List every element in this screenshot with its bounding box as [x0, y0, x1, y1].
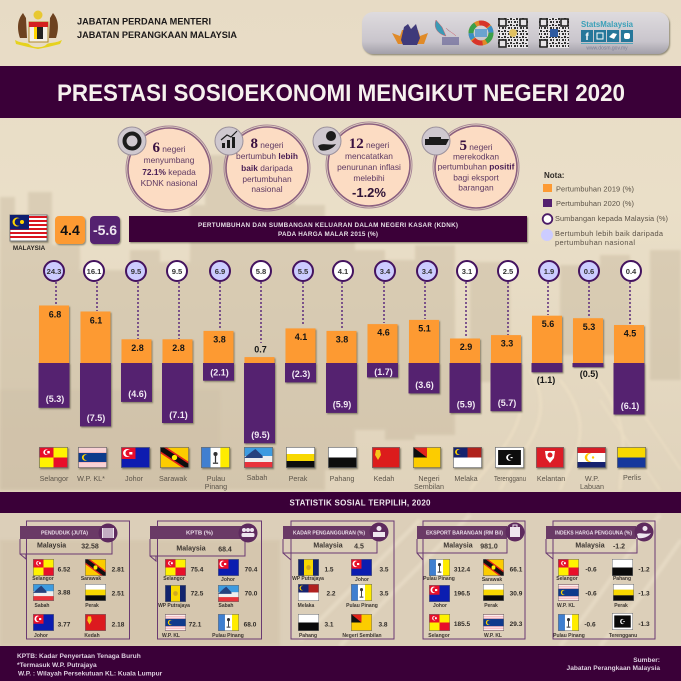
- row 3: 3.1: [324, 622, 334, 628]
- row 3: Johor: [34, 633, 48, 639]
- logo: strategi negara: [435, 20, 459, 45]
- flag: Pulau Pinang: Pulau: [207, 474, 225, 483]
- Selangor column: 6.8: [49, 310, 61, 320]
- row 1: 66.1: [510, 566, 523, 574]
- flag: Terengganu: [494, 447, 526, 483]
- Kedah column: 3.4: [380, 267, 391, 276]
- Johor column: 2.8: [131, 343, 144, 353]
- row 2: Pulau Pinang: [346, 603, 378, 609]
- Sabah column: (9.5): [251, 430, 270, 440]
- row 1: Pahang: [613, 576, 631, 582]
- Johor column: 9.5: [131, 267, 142, 276]
- Sarawak column: [162, 261, 193, 423]
- panel: KPTB: Malaysia: [176, 546, 206, 552]
- flag: Melaka: [453, 447, 482, 483]
- panel: penduduk: [20, 521, 130, 639]
- Malaysia 2020 value: -5.6: [93, 222, 117, 238]
- Perlis column: [614, 261, 644, 414]
- logo: SDG wheel: [471, 23, 491, 43]
- flag: Pahang: Pahang: [330, 474, 354, 483]
- callout: 8 negeri: 8 negeri: [250, 136, 284, 152]
- row 1: 70.4: [245, 566, 258, 574]
- chart heading banner: PERTUMBUHAN DAN SUMBANGAN KELUARAN DALAM NEGERI KASAR (KDNK): [198, 222, 458, 229]
- panel: kadar pengangguran: [283, 521, 394, 639]
- flag: Selangor: Selangor: [40, 474, 69, 483]
- Sabah column: 0.7: [254, 344, 267, 354]
- callout: 12 negeri: melebihi: [353, 173, 385, 183]
- Pulau Pinang column: 6.9: [215, 267, 225, 276]
- flag: W.P. KL: [77, 447, 107, 483]
- title band: PRESTASI SOSIOEKONOMI MENGIKUT NEGERI 2020: [57, 80, 625, 107]
- legend item: 2019: Pertumbuhan 2019 (%): [556, 184, 634, 194]
- section band: social statistics: [0, 492, 681, 513]
- row 2: 30.9: [510, 590, 523, 598]
- row 2: -1.3: [638, 590, 650, 598]
- panel: penduduk: 32.58: [81, 544, 99, 550]
- StatsMalaysia social block: [581, 19, 633, 52]
- row 2: 2.2: [326, 590, 336, 598]
- Pahang column: 4.1: [338, 267, 349, 276]
- flag: Pulau Pinang: [201, 447, 230, 491]
- row 1: [32, 559, 125, 582]
- QR code 2: [539, 18, 569, 48]
- Kelantan column: (1.1): [537, 375, 555, 385]
- Terengganu column: [490, 261, 522, 411]
- callout: 8 negeri: pertumbuhan: [242, 174, 292, 184]
- row 1: 1.5: [324, 566, 334, 574]
- Pahang column: [326, 261, 357, 413]
- Johor column: [121, 261, 152, 402]
- panel: indeks harga pengguna: Malaysia: [575, 542, 605, 550]
- Melaka column: (5.9): [457, 400, 475, 410]
- section band: social statistics: STATISTIK SOSIAL TERPILIH, 2020: [290, 498, 431, 508]
- flag: Perak: [286, 447, 315, 483]
- footer notes: [17, 653, 163, 678]
- Pulau Pinang column: [203, 261, 234, 381]
- row 3: [298, 614, 388, 639]
- flag: Sarawak: Sarawak: [159, 474, 187, 483]
- callout: 6 negeri: KDNK nasional: [141, 178, 198, 188]
- row 3: Pulau Pinang: [553, 633, 585, 639]
- row 3: [33, 614, 125, 639]
- callout: 8 negeri: baik daripada: [241, 163, 293, 173]
- flag: Johor: [121, 447, 150, 483]
- Terengganu column: 2.5: [503, 267, 514, 276]
- legend item: 2020: Pertumbuhan 2020 (%): [556, 199, 634, 208]
- row 1: [423, 559, 523, 583]
- footer notes: *Termasuk W.P. Putrajaya: [17, 662, 97, 669]
- row 3: Kedah: [84, 633, 100, 639]
- row 1: Johor: [221, 577, 235, 583]
- row 3: Negeri Sembilan: [342, 633, 382, 639]
- row 2: 3.5: [379, 590, 389, 598]
- flag: W.P. KL: W.P. KL*: [77, 474, 105, 483]
- row 3: 3.77: [58, 622, 71, 628]
- row 1: [556, 559, 650, 582]
- flag: Kelantan: [536, 447, 565, 483]
- row 3: [428, 614, 523, 639]
- flag: Selangor: [39, 447, 69, 483]
- panel: eksport barangan: [417, 521, 525, 639]
- flag: Pahang: [328, 447, 357, 483]
- icon: unemployment: [370, 522, 388, 542]
- row 2: Johor: [433, 603, 447, 609]
- footer source: Jabatan Perangkaan Malaysia: [567, 665, 660, 672]
- Malaysia 2019 value: [55, 216, 85, 244]
- Sarawak column: 9.5: [172, 267, 183, 276]
- QR code 1: [498, 18, 528, 48]
- footer band: [0, 646, 681, 681]
- Melaka column: [450, 261, 480, 413]
- row 2: [429, 584, 523, 609]
- callout: 5 negeri: merekodkan: [453, 152, 499, 162]
- W.P. Labuan column: 5.3: [583, 322, 595, 332]
- flag: Kelantan: Kelantan: [537, 474, 565, 483]
- footer notes: KPTB: Kadar Penyertaan Tenaga Buruh: [17, 653, 141, 660]
- Perak column: [285, 261, 316, 382]
- logo: banci: [392, 24, 428, 45]
- flag: Kedah: [372, 447, 400, 483]
- row 2: [557, 584, 650, 609]
- Kedah column: 4.6: [377, 328, 390, 338]
- row 3: 29.3: [510, 621, 523, 628]
- panel: kadar pengangguran: 4.5: [354, 544, 364, 550]
- panel: indeks harga pengguna: INDEKS HARGA PENGGUNA (%): [555, 530, 632, 536]
- Perak column: 5.5: [298, 267, 309, 276]
- icon: price hand: [634, 522, 654, 542]
- icon: export: [506, 522, 524, 542]
- row 2: [158, 585, 258, 609]
- row 3: 3.8: [378, 622, 388, 628]
- row 3: 2.18: [112, 622, 125, 628]
- callout: 6 negeri: [118, 126, 212, 212]
- row 1: 3.5: [379, 566, 389, 574]
- Pahang column: (5.9): [333, 400, 351, 410]
- callout: 6 negeri: menyumbang: [144, 155, 195, 165]
- callout: 5 negeri: bagi eksport: [453, 172, 499, 182]
- Malaysia 2020 value: [90, 216, 120, 244]
- StatsMalaysia social block: StatsMalaysia: [581, 19, 633, 29]
- legend item: better than national: [541, 229, 664, 247]
- Johor column: (4.6): [128, 389, 147, 399]
- row 2: Sabah: [218, 603, 234, 609]
- Pulau Pinang column: 3.8: [213, 334, 226, 344]
- flag: Sabah: [244, 447, 273, 482]
- footer source: [567, 657, 660, 672]
- row 1: Selangor: [163, 576, 185, 582]
- row 1: WP Putrajaya: [292, 576, 324, 582]
- callout: 6 negeri: 6 negeri: [152, 140, 186, 156]
- Malaysia flag: MALAYSIA: [13, 245, 46, 252]
- Selangor column: [38, 261, 70, 408]
- row 3: 185.5: [454, 621, 471, 628]
- row 1: -1.2: [638, 566, 650, 574]
- panel: indeks harga pengguna: -1.2: [613, 544, 625, 550]
- flag: Negeri Sembilan: Sembilan: [414, 482, 444, 491]
- row 2: Perak: [614, 603, 628, 609]
- row 2: Perak: [484, 603, 498, 609]
- Kelantan column: [532, 261, 562, 385]
- row 2: Melaka: [298, 603, 315, 609]
- Negeri Sembilan column: [408, 261, 440, 393]
- callout: 5 negeri: 5 negeri: [459, 138, 493, 154]
- W.P. KL column: 16.1: [87, 267, 102, 276]
- background: stats section texture: [0, 515, 681, 646]
- title band: [0, 66, 681, 118]
- footer source: Sumber:: [633, 657, 660, 664]
- W.P. KL column: [80, 261, 111, 426]
- row 3: -0.6: [584, 622, 596, 628]
- callout: 12 negeri: mencatatkan: [345, 151, 393, 161]
- header: logo pill: [362, 12, 669, 54]
- Perak column: (2.3): [292, 369, 310, 379]
- Kelantan column: 5.6: [542, 319, 554, 329]
- flag: W.P. Labuan: W.P.: [585, 474, 599, 483]
- Pahang column: 3.8: [336, 334, 348, 344]
- callout: 12 negeri: penurunan inflasi: [337, 162, 401, 172]
- row 1: Pulau Pinang: [423, 576, 455, 582]
- Malaysia 2019 value: 4.4: [60, 222, 80, 238]
- header: organisation names: [77, 16, 237, 41]
- Malaysia flag: [10, 215, 47, 252]
- flag: Perak: Perak: [289, 474, 308, 483]
- Perlis column: 4.5: [624, 328, 636, 338]
- StatsMalaysia social block: www.dosm.gov.my: [586, 46, 628, 52]
- W.P. Labuan column: (0.5): [580, 369, 598, 379]
- row 2: Perak: [85, 603, 99, 609]
- row 2: W.P. KL: [557, 603, 575, 609]
- row 1: Sarawak: [482, 577, 502, 583]
- callout: 12 negeri: -1.2%: [352, 185, 386, 200]
- flag: Pulau Pinang: Pinang: [205, 482, 227, 491]
- panel: indeks harga pengguna: [546, 521, 655, 639]
- Pulau Pinang column: (2.1): [210, 368, 229, 378]
- row 3: Terengganu: [609, 633, 637, 639]
- W.P. Labuan column: [572, 261, 604, 379]
- flag: W.P. Labuan: Labuan: [580, 482, 604, 491]
- panel: KPTB: 68.4: [218, 546, 232, 554]
- icon: workforce: [238, 524, 258, 542]
- row 3: [553, 613, 650, 639]
- background: lower city and highway: [0, 360, 681, 490]
- row 3: Pahang: [299, 633, 317, 639]
- row 2: 70.0: [245, 590, 258, 598]
- header: organisation names: JABATAN PERDANA MENTERI: [77, 16, 211, 28]
- row 1: 2.81: [112, 566, 125, 574]
- row 1: [292, 559, 389, 583]
- row 3: Pulau Pinang: [212, 633, 244, 639]
- row 3: W.P. KL: [484, 633, 502, 639]
- legend item: contribution: Sumbangan kepada Malaysia (%): [555, 214, 668, 223]
- callout: 5 negeri: barangan: [458, 182, 494, 192]
- legend: nota: [541, 171, 668, 247]
- flag: Terengganu: Terengganu: [494, 474, 526, 483]
- Sarawak column: 2.8: [172, 343, 185, 353]
- row 1: Selangor: [556, 576, 578, 582]
- W.P. KL column: 6.1: [90, 316, 102, 326]
- flag: Kedah: Kedah: [374, 474, 394, 483]
- callout: 8 negeri: [215, 125, 310, 211]
- W.P. Labuan column: 0.6: [584, 267, 594, 276]
- Sabah column: 5.8: [256, 267, 266, 276]
- Perak column: 4.1: [295, 332, 307, 342]
- row 2: 3.88: [58, 590, 71, 596]
- callout: 12 negeri: 12 negeri: [349, 136, 389, 152]
- callout: 6 negeri: 72.1% kepada: [142, 167, 196, 177]
- Melaka column: 3.1: [462, 267, 473, 276]
- flag: Negeri Sembilan: [413, 447, 444, 491]
- callout: 5 negeri: [422, 124, 519, 210]
- panel: eksport barangan: EKSPORT BARANGAN (RM Bil): [426, 530, 503, 536]
- flag: Johor: Johor: [125, 474, 144, 483]
- Selangor column: 24.3: [47, 267, 61, 276]
- flag: Perlis: Perlis: [623, 473, 641, 482]
- StatsMalaysia social block: f: [585, 32, 589, 43]
- legend item: better than national: pertumbuhan nasional: [555, 238, 635, 247]
- callout: 8 negeri: bertumbuh lebih: [236, 151, 298, 161]
- Perlis column: 0.4: [626, 267, 637, 276]
- row 1: -0.6: [585, 566, 597, 574]
- Terengganu column: 3.3: [501, 338, 513, 348]
- row 1: [163, 559, 258, 583]
- flag: W.P. Labuan: [577, 447, 606, 491]
- row 2: 72.5: [191, 590, 204, 598]
- row 3: Selangor: [428, 633, 450, 639]
- panel: kadar pengangguran: KADAR PENGANGGURAN (%): [293, 530, 365, 536]
- row 3: 68.0: [244, 622, 257, 628]
- row 2: [33, 584, 125, 609]
- background: faded city skyline: [0, 155, 681, 490]
- row 2: 196.5: [454, 590, 471, 598]
- row 3: -1.3: [638, 621, 650, 628]
- row 3: [162, 614, 257, 639]
- Negeri Sembilan column: (3.6): [415, 380, 434, 390]
- header: organisation names: JABATAN PERANGKAAN MALAYSIA: [77, 30, 237, 41]
- Perlis column: (6.1): [621, 401, 639, 411]
- chart heading banner: PADA HARGA MALAR 2015 (%): [278, 231, 378, 238]
- panel: kadar pengangguran: Malaysia: [313, 542, 343, 550]
- row 3: W.P. KL: [162, 633, 180, 639]
- row 2: Sabah: [34, 603, 50, 609]
- state flags and names: [39, 447, 646, 491]
- callout: 8 negeri: nasional: [251, 184, 283, 194]
- flag: Melaka: Melaka: [454, 474, 478, 483]
- row 2: 2.51: [112, 590, 125, 598]
- flag: Sabah: Sabah: [247, 473, 267, 482]
- panel: penduduk: Malaysia: [37, 542, 66, 550]
- chart heading banner: [129, 216, 527, 242]
- Selangor column: (5.3): [46, 394, 64, 404]
- panel: KPTB: [150, 521, 262, 639]
- Negeri Sembilan column: 5.1: [418, 324, 431, 334]
- row 3: 72.1: [189, 622, 202, 628]
- row 2: [298, 584, 389, 609]
- Melaka column: 2.9: [460, 342, 472, 352]
- Sabah column: [244, 261, 275, 443]
- Negeri Sembilan column: 3.4: [422, 267, 433, 276]
- callout: 12 negeri: [313, 122, 412, 208]
- flag: Perlis: [617, 447, 646, 482]
- row 1: Sarawak: [81, 576, 101, 582]
- header: coat of arms: [15, 10, 62, 49]
- panel: penduduk: PENDUDUK (JUTA): [41, 530, 88, 536]
- W.P. KL column: (7.5): [87, 413, 105, 423]
- panel: eksport barangan: Malaysia: [443, 542, 473, 550]
- row 1: 312.4: [454, 566, 471, 574]
- row 2: -0.6: [585, 590, 597, 598]
- Kedah column: (1.7): [374, 367, 393, 377]
- background: stats section: [0, 513, 681, 646]
- row 1: Selangor: [32, 576, 54, 582]
- panel: eksport barangan: 981.0: [480, 544, 498, 550]
- flag: Negeri Sembilan: Negeri: [418, 474, 440, 483]
- legend: nota: Nota:: [544, 171, 564, 180]
- Sarawak column: (7.1): [169, 410, 188, 420]
- legend item: better than national: Bertumbuh lebih baik daripada: [555, 229, 664, 238]
- row 1: Johor: [355, 577, 369, 583]
- Terengganu column: (5.7): [498, 398, 516, 408]
- icon: people: [98, 524, 118, 542]
- row 1: 6.52: [58, 566, 71, 574]
- row 2: WP Putrajaya: [158, 603, 190, 609]
- callout: 5 negeri: pertumbuhan positif: [438, 162, 514, 172]
- Kedah column: [367, 261, 398, 377]
- flag: Sarawak: [159, 447, 189, 483]
- Kelantan column: 1.9: [544, 267, 554, 276]
- footer notes: W.P. : Wilayah Persekutuan KL: Kuala Lumpur: [18, 670, 163, 678]
- bar chart: state GDP growth: [38, 261, 644, 443]
- panel: KPTB: KPTB (%): [186, 530, 213, 536]
- row 1: 75.4: [191, 566, 204, 574]
